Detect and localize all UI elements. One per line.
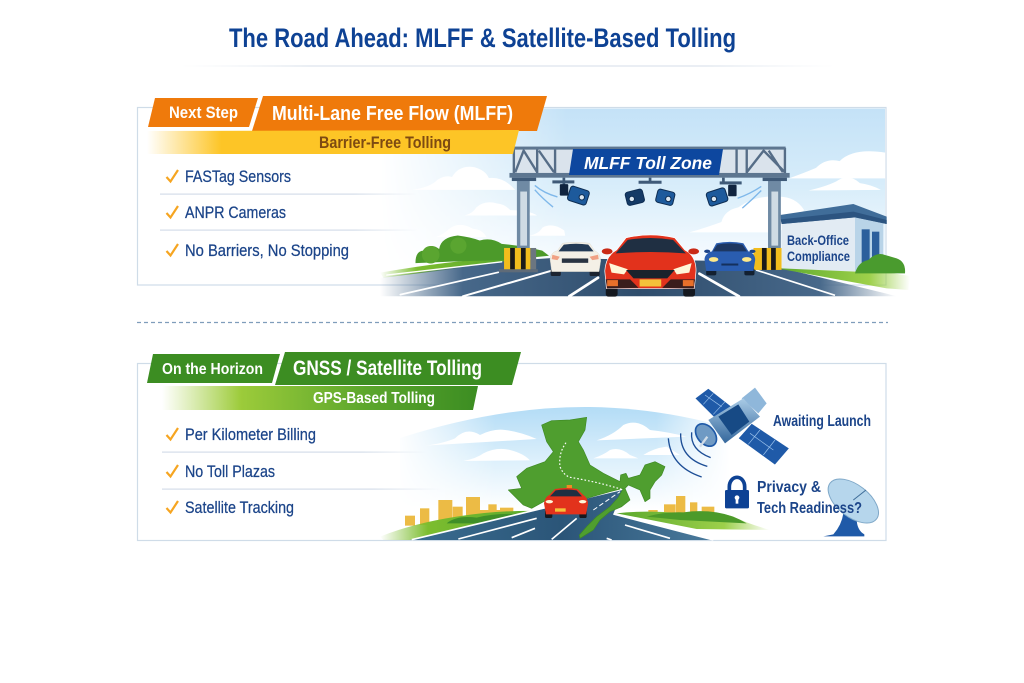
- cameras: [535, 178, 761, 208]
- blue car: [704, 242, 756, 275]
- signal waves: [668, 432, 711, 477]
- item: Per Kilometer Billing: Per Kilometer Billing: [185, 426, 316, 444]
- back-office building: [756, 204, 910, 295]
- label: Privacy and Tech Readiness: [757, 479, 862, 517]
- India map: [508, 417, 665, 538]
- item: FASTag Sensors: FASTag Sensors: [185, 168, 291, 186]
- city skylines: [405, 496, 714, 526]
- panel 1 frame: [138, 108, 886, 285]
- clouds: [412, 151, 885, 237]
- car: [544, 485, 588, 518]
- badge: Next Step: Next Step: [169, 104, 238, 122]
- subheading: GPS-Based Tolling: GPS-Based Tolling: [313, 390, 435, 407]
- item: No Toll Plazas: No Toll Plazas: [185, 463, 275, 481]
- red car: [602, 235, 699, 297]
- label: Privacy and Tech Readiness: Privacy &: [757, 479, 821, 496]
- icon: satellite dish: [820, 470, 886, 536]
- list: MLFF features: [160, 168, 418, 260]
- scene: toll gantry: [380, 108, 910, 297]
- badge: On the Horizon: On the Horizon: [162, 361, 263, 378]
- item: ANPR Cameras: ANPR Cameras: [185, 204, 286, 222]
- label: Awaiting Launch: Awaiting Launch: [773, 413, 871, 430]
- satellite: [691, 388, 789, 465]
- list: GNSS features: [162, 426, 442, 517]
- panel: MLFF: [138, 96, 910, 297]
- gantry sign: [569, 149, 723, 175]
- white car: [550, 242, 601, 276]
- building label: Back-Office: [787, 233, 849, 248]
- road: [410, 488, 713, 540]
- clouds: [425, 423, 687, 461]
- sky: [411, 407, 718, 498]
- scene: India map and satellite: [380, 388, 886, 540]
- sky: [380, 108, 885, 284]
- subheading: Barrier-Free Tolling: [147, 130, 519, 154]
- badge: On the Horizon: [147, 354, 280, 383]
- subheading: Barrier-Free Tolling: Barrier-Free Tolling: [319, 134, 451, 152]
- heading: GNSS / Satellite Tolling: GNSS / Satellite Tolling: [293, 356, 482, 380]
- label: Privacy and Tech Readiness: Tech Readiness?: [757, 500, 862, 517]
- building verge: [773, 268, 910, 290]
- title rule: [180, 66, 835, 67]
- panel: GNSS: [138, 352, 886, 540]
- dashed divider: [137, 322, 888, 324]
- subheading: GPS-Based Tolling: [162, 386, 478, 410]
- heading: Multi-Lane Free Flow: Multi-Lane Free Flow (MLFF): [272, 102, 513, 125]
- panel 2 frame: [138, 364, 886, 540]
- title: The Road Ahead: MLFF & Satellite-Based Tolling: [229, 23, 736, 53]
- green verges: [380, 511, 770, 540]
- item: No Barriers: No Barriers, No Stopping: [185, 242, 349, 260]
- item: Satellite Tracking: Satellite Tracking: [185, 499, 294, 517]
- building label: Compliance: [787, 249, 850, 264]
- icon: padlock: [725, 477, 749, 508]
- gantry sign: MLFF Toll Zone: [584, 153, 712, 173]
- badge: Next Step: [148, 98, 258, 127]
- road: [380, 258, 897, 296]
- gantry: [509, 147, 790, 249]
- building label: [787, 233, 850, 264]
- bollards: [499, 248, 782, 272]
- left grass and bushes: [380, 235, 549, 278]
- heading: Multi-Lane Free Flow: [252, 96, 547, 131]
- heading: GNSS / Satellite Tolling: [275, 352, 521, 385]
